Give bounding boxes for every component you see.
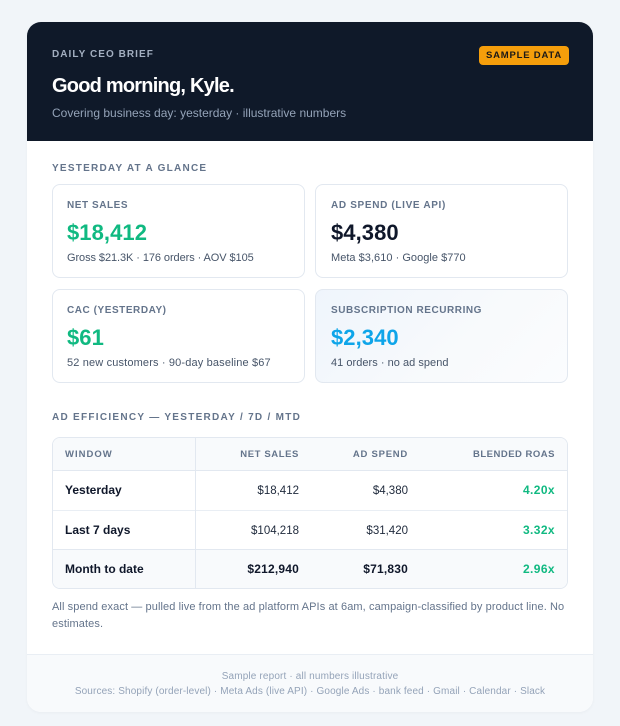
badge: sample data: SAMPLE DATA — [486, 50, 562, 61]
note: spend source: All spend exact — pulled live from the ad platform APIs at 6am, campaign-classified by product line. No — [52, 601, 564, 613]
panel: CAC — [52, 289, 305, 383]
header: window: WINDOW — [65, 449, 113, 460]
row: last 7 days — [53, 511, 567, 550]
detail: ad spend: Meta $3,610 · Google $770 — [331, 252, 466, 264]
badge: sample data — [479, 46, 569, 65]
cell: month to date name: Month to date — [65, 562, 144, 576]
cell: last 7 days ad spend: $31,420 — [366, 525, 408, 537]
cell: yesterday ROAS: 4.20x — [523, 483, 555, 497]
label: net sales: NET SALES — [67, 200, 128, 211]
table header row — [53, 438, 567, 471]
cell: last 7 days ROAS: 3.32x — [523, 523, 555, 537]
cell: last 7 days name: Last 7 days — [65, 523, 130, 537]
footer — [27, 654, 593, 712]
note: spend source — [52, 601, 564, 630]
cell: last 7 days net sales: $104,218 — [251, 525, 299, 537]
panel: net sales — [52, 184, 305, 278]
value: net sales: $18,412 — [67, 220, 147, 245]
subheading: coverage: Covering business day: yesterday · illustrative numbers — [52, 106, 346, 120]
header: ad spend: AD SPEND — [353, 449, 408, 460]
cell: month to date net sales: $212,940 — [247, 562, 299, 576]
label: ad spend: AD SPEND (LIVE API) — [331, 200, 446, 211]
table: ad efficiency — [52, 437, 568, 589]
value: subscription recurring: $2,340 — [331, 325, 399, 350]
detail: net sales: Gross $21.3K · 176 orders · AOV $105 — [67, 252, 254, 264]
note: spend source: estimates. — [52, 618, 103, 630]
label: subscription recurring: SUBSCRIPTION RECURRING — [331, 305, 482, 316]
footer line: sources: Sources: Shopify (order-level) · Meta Ads (live API) · Google Ads · bank feed · Gmail · Calendar · Slack — [75, 686, 545, 697]
section heading: yesterday at a glance: YESTERDAY AT A GLANCE — [52, 163, 207, 174]
label: CAC: CAC (YESTERDAY) — [67, 305, 167, 316]
cell: month to date ad spend: $71,830 — [363, 562, 408, 576]
header: net sales: NET SALES — [240, 449, 299, 460]
header: blended ROAS: BLENDED ROAS — [473, 449, 555, 460]
value: CAC: $61 — [67, 325, 104, 350]
detail: CAC: 52 new customers · 90-day baseline $67 — [67, 357, 271, 369]
detail: subscription recurring: 41 orders · no ad spend — [331, 357, 448, 369]
heading: greeting: Good morning, Kyle. — [52, 75, 234, 97]
cell: yesterday name: Yesterday — [65, 483, 122, 497]
row: yesterday — [53, 471, 567, 511]
cell: yesterday ad spend: $4,380 — [373, 485, 408, 497]
value: ad spend: $4,380 — [331, 220, 399, 245]
panel: header — [27, 22, 593, 141]
panel: subscription recurring — [315, 289, 568, 383]
cell: yesterday net sales: $18,412 — [257, 485, 299, 497]
section heading: ad efficiency: AD EFFICIENCY — YESTERDAY / 7D / MTD — [52, 412, 301, 423]
footer line: sample report: Sample report · all numbers illustrative — [222, 671, 398, 682]
cell: month to date ROAS: 2.96x — [523, 562, 555, 576]
row: month to date — [53, 550, 567, 589]
eyebrow: daily CEO brief: DAILY CEO BRIEF — [52, 49, 154, 60]
panel: ad spend — [315, 184, 568, 278]
